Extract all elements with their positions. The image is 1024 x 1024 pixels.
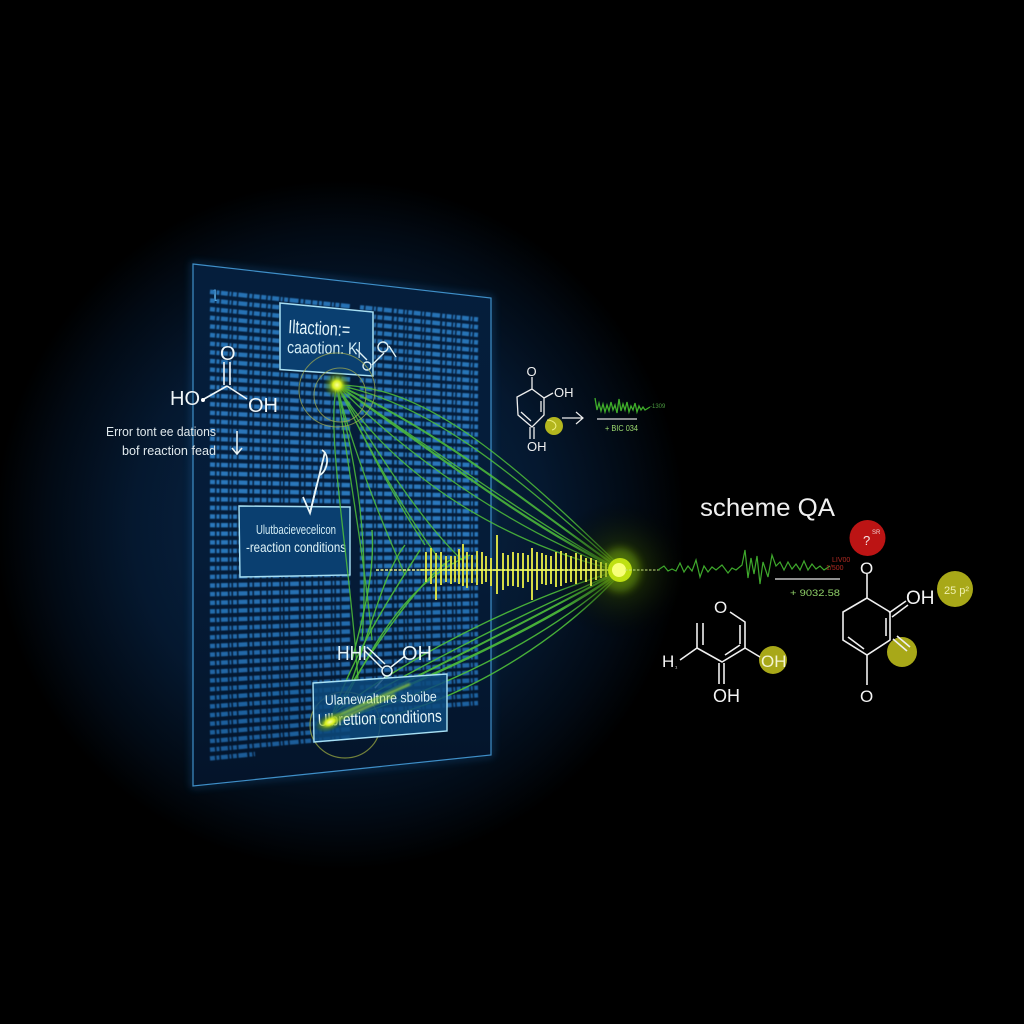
red alert marker: ? bbox=[863, 533, 870, 548]
red alert marker: SR bbox=[872, 530, 881, 536]
focus rings: lower bbox=[310, 692, 380, 758]
icon: arrow to small trace bbox=[562, 412, 583, 424]
molecule: large right: O bbox=[860, 559, 873, 578]
small trace: + BIC 034 bbox=[605, 424, 638, 433]
focus glow: lower bbox=[312, 707, 348, 737]
highlight box: vibration conditions: Ulbrettion conditions bbox=[317, 707, 442, 730]
molecule: large right: OH bbox=[906, 588, 934, 609]
icon: small structure near first box bbox=[356, 342, 396, 370]
beam glow in lower box bbox=[328, 684, 410, 724]
molecule: large right bbox=[843, 559, 934, 706]
highlight box: vibration conditions bbox=[313, 674, 447, 742]
red trace labels: LIV00 bbox=[832, 557, 850, 564]
molecule: upper small bbox=[517, 364, 574, 454]
molecule: lower right: O bbox=[714, 598, 727, 617]
highlight box: reaction conditions: Ulutbacievecelicon bbox=[256, 522, 336, 537]
focus glow: upper bbox=[323, 371, 351, 399]
yellow highlight bbox=[887, 637, 917, 667]
molecule: upper small: OH bbox=[527, 439, 546, 454]
highlight box: reaction caption: Iltaction:= bbox=[288, 317, 351, 341]
panel sheet bbox=[193, 264, 491, 786]
left label: error note: Error tont ee dations bbox=[106, 425, 216, 439]
molecule: upper small: OH bbox=[554, 385, 574, 400]
icon: arrow between boxes bbox=[303, 450, 327, 513]
focus rings: upper bbox=[299, 353, 375, 427]
left label: error note bbox=[106, 425, 216, 458]
molecule: lower right: OH bbox=[713, 686, 740, 706]
highlight dot bbox=[545, 417, 563, 435]
molecule: lower right bbox=[662, 598, 787, 706]
green beams from upper focus bbox=[334, 385, 620, 680]
title: scheme QA: scheme QA bbox=[700, 494, 835, 522]
left label: error note: bof reaction fead bbox=[122, 444, 216, 458]
icon: down arrow bbox=[232, 431, 242, 454]
highlight box: reaction caption bbox=[280, 303, 373, 376]
molecule: large right: O bbox=[860, 687, 873, 706]
molecule: HO-C(=O)-OH bbox=[170, 343, 278, 417]
molecule: lower right: H bbox=[662, 652, 674, 671]
panel: document bbox=[193, 264, 491, 786]
molecule: HO-C(=O)-OH: OH bbox=[248, 395, 278, 417]
highlight box: vibration conditions: Ulanewaltnre sboibe bbox=[325, 688, 437, 708]
output trace: 1/500 bbox=[826, 565, 844, 572]
yellow marker: value bbox=[937, 571, 973, 607]
small trace bbox=[595, 398, 666, 433]
small trace: -1309 bbox=[650, 404, 666, 410]
molecule: inside lower panel: OH bbox=[402, 643, 432, 665]
yellow marker: value: 25 p² bbox=[944, 585, 969, 597]
highlight box: reaction caption: caaotion: K| bbox=[287, 338, 361, 358]
blue halo bbox=[0, 180, 685, 870]
highlight box: reaction conditions bbox=[239, 506, 350, 577]
yellow highlight bbox=[759, 646, 787, 674]
molecule: HO-C(=O)-OH: HO bbox=[170, 388, 200, 410]
molecule: lower right: OH bbox=[761, 652, 786, 671]
output trace bbox=[625, 550, 850, 599]
panel glow bbox=[193, 264, 491, 786]
molecule: inside lower panel bbox=[337, 643, 432, 688]
waveform: main signal bbox=[376, 535, 620, 600]
molecule: lower right: ₁ bbox=[675, 663, 678, 670]
main node bbox=[600, 548, 640, 592]
molecule: HO-C(=O)-OH: O bbox=[220, 343, 236, 365]
green glow around main node bbox=[550, 500, 690, 640]
text column right bbox=[360, 307, 478, 712]
red alert marker bbox=[850, 520, 886, 556]
output trace: + 9032.58 bbox=[790, 588, 840, 599]
molecule: upper small: O bbox=[526, 364, 537, 379]
page number: 1 bbox=[210, 286, 219, 305]
green beams from lower focus bbox=[330, 530, 620, 725]
text column left bbox=[210, 292, 350, 758]
molecule: inside lower panel: HHI bbox=[337, 643, 367, 665]
highlight box: reaction conditions: -reaction conditions bbox=[246, 539, 346, 555]
